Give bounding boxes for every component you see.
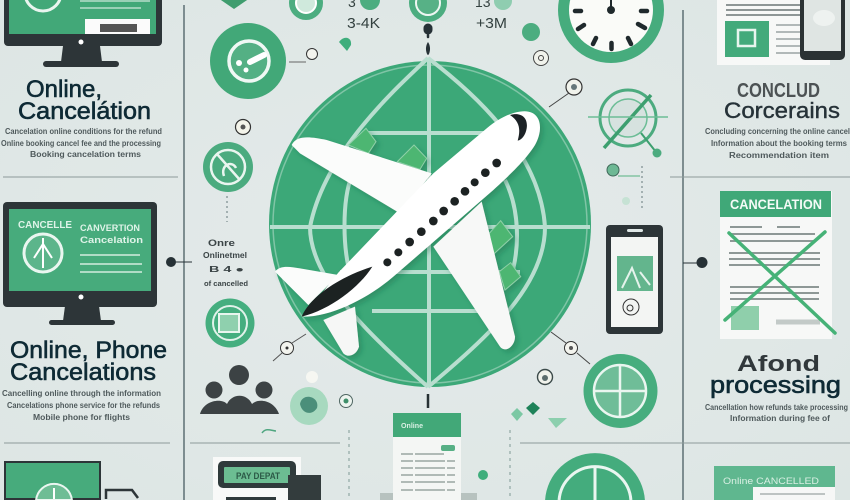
illustration: airplane [275, 111, 540, 356]
document: cancelation form: CANCELATION [730, 196, 822, 212]
heading: concluding concerns [724, 80, 840, 123]
heading: online cancelation: Cancelátion [18, 98, 151, 125]
document: bottom center receipt: Online [401, 423, 423, 430]
text block: center left label: Onre [208, 238, 235, 248]
text block: phone cancelation description [2, 389, 161, 422]
stat: 3-4K: 3-4K [347, 15, 380, 32]
panel: online phone cancelations [2, 202, 192, 422]
icon: document circle [206, 298, 254, 348]
icon: small green dots [339, 23, 540, 51]
icon: cockpit [510, 114, 527, 141]
heading: online cancelation [18, 76, 151, 125]
document: bottom right card [714, 466, 835, 500]
text block: concerns description [705, 127, 850, 160]
stat: 3-4K [347, 0, 380, 32]
panel: online cancelation [1, 0, 162, 159]
stat: +3M: +3M [476, 15, 507, 32]
text block: online cancelation description [1, 127, 162, 159]
chart: globe [269, 58, 591, 387]
icon: small ring bottom [262, 394, 352, 433]
text block: online cancelation description: Online booking cancel fee and the processing [1, 139, 161, 148]
icon: top left circle [289, 0, 323, 20]
text block: phone cancelation description: Cancelling online through the information [2, 389, 161, 398]
icon: pin right [551, 332, 590, 364]
text block: online cancelation description: Booking cancelation terms [30, 150, 142, 159]
icon: desktop monitor with screen: Cancelation [80, 235, 143, 245]
icon: desktop monitor [4, 0, 162, 67]
text block: concerns description: Recommendation item [729, 151, 829, 160]
heading: refund processing: processing [710, 372, 841, 399]
icon: bottom circle [545, 453, 645, 500]
icon: phone device [606, 225, 663, 334]
panel: refund processing [683, 191, 848, 423]
text block: online cancelation description: Cancelation online conditions for the refund [5, 127, 162, 136]
heading: refund processing [710, 351, 841, 399]
text block: concerns description: Information about the booking terms [711, 139, 848, 148]
heading: online phone cancelations [10, 337, 167, 386]
icon: green accents [428, 394, 567, 480]
icon: crossed circle [203, 142, 253, 192]
icon: target ring [584, 354, 658, 428]
icon: people group [200, 365, 279, 414]
icon: engines [348, 128, 521, 290]
panel: concluding concerns [705, 0, 850, 160]
stat: +3M [475, 0, 507, 32]
heading: refund processing: Afond [737, 351, 820, 376]
text block: phone cancelation description: Mobile phone for flights [33, 413, 131, 422]
text block: refund description: Information during fee of [730, 414, 830, 423]
icon: small ring and dashes right [607, 164, 642, 208]
text block: center left label: of cancelled [204, 281, 248, 288]
text block: refund description [705, 403, 848, 423]
icon: bottom small ring right [538, 370, 552, 384]
panel: bottom left monitor [5, 462, 138, 500]
text block: phone cancelation description: Cancelations phone service for the refunds [7, 401, 161, 410]
connector: left dot [166, 257, 192, 267]
text block: center left label: B 4 ● [209, 265, 244, 274]
icon: top center circle [409, 0, 447, 55]
icon: tail stripe [302, 267, 372, 317]
icon: large green circle [210, 23, 286, 99]
icon: desk phone [213, 457, 321, 500]
icon: desktop monitor with screen [3, 202, 157, 325]
icon: desktop monitor with screen: CANCELLE [18, 220, 72, 231]
icon: desk phone: PAY DEPAT [236, 471, 280, 481]
heading: concluding concerns: CONCLUD [737, 80, 820, 102]
heading: concluding concerns: Corcerains [724, 98, 840, 123]
icon: pin left [273, 334, 306, 361]
heading: online phone cancelations: Online, Phone [10, 337, 167, 364]
document: bottom right card: Online CANCELLED [723, 476, 820, 486]
icon: clock [558, 0, 664, 63]
icon: leaf top [218, 0, 250, 9]
text block: center left label: Onlinetmel [203, 251, 247, 260]
icon: small ring [236, 120, 250, 134]
document: bottom center receipt [380, 413, 477, 500]
icon: desktop monitor with screen: CANVERTION [80, 223, 140, 233]
text block: center left label [203, 238, 248, 288]
icon: slashed green ring [588, 90, 668, 158]
connector: right dot [683, 257, 708, 268]
document: cancelation form [720, 191, 835, 339]
icon: document with phone [717, 0, 845, 65]
icon: green blob [290, 371, 328, 425]
heading: online cancelation: Online, [26, 76, 102, 103]
icon: small rings top [289, 48, 582, 107]
heading: online phone cancelations: Cancelations [10, 359, 156, 386]
